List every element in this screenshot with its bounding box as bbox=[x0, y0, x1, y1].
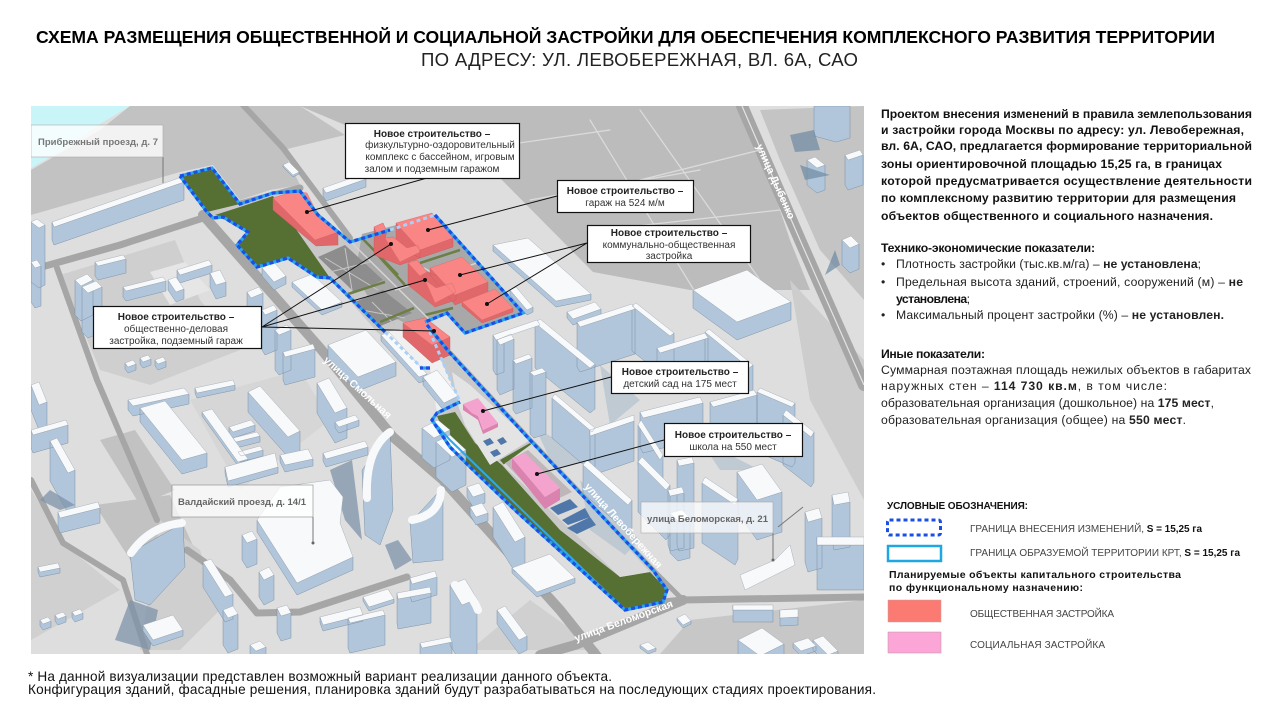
address label: Беломорская: улица Беломорская, д. 21 bbox=[647, 514, 769, 525]
existing buildings north bbox=[31, 106, 863, 340]
text block: technical indicators: установлена; bbox=[896, 292, 970, 306]
callout: kindergarten bbox=[612, 362, 748, 394]
green zones bbox=[180, 168, 330, 278]
callout: sports complex: залом и подземным гаражом bbox=[365, 164, 500, 175]
text block: technical indicators: Максимальный процент застройки (%) – не установлен. bbox=[896, 308, 1224, 322]
residential towers center bbox=[552, 388, 814, 565]
text block: intro: и застройки города Москвы по адресу: ул. Левобережная, bbox=[881, 123, 1244, 137]
text block: intro: вл. 6А, САО, предлагается формирование территориальной bbox=[881, 139, 1252, 153]
callout: school bbox=[664, 424, 802, 456]
legend item: social buildings: СОЦИАЛЬНАЯ ЗАСТРОЙКА bbox=[970, 638, 1105, 651]
footnote: * На данной визуализации представлен возможный вариант реализации данного объекта. bbox=[28, 669, 612, 684]
legend item: KRT boundary: ГРАНИЦА ОБРАЗУЕМОЙ ТЕРРИТОРИИ КРТ, S = 15,25 га bbox=[970, 546, 1240, 559]
street names: улица Левобережная bbox=[582, 481, 664, 571]
street names: улица Дыбенко bbox=[753, 142, 797, 221]
map road lines bbox=[31, 105, 864, 660]
callout: communal public: коммунально-общественная bbox=[603, 239, 735, 251]
footnote: Конфигурация зданий, фасадные решения, планировка зданий будут разрабатываться на последующих стадиях проектирования. bbox=[28, 682, 876, 697]
text block: technical indicators: • bbox=[881, 257, 885, 271]
callout: sports complex: физкультурно-оздоровительный bbox=[365, 139, 515, 151]
legend: Планируемые объекты капитального строительства bbox=[889, 569, 1181, 581]
callout: communal public bbox=[588, 226, 750, 262]
text block: other indicators: образовательная организация (дошкольное) на 175 мест, bbox=[881, 396, 1214, 410]
central development site bbox=[180, 168, 667, 610]
text block: intro: которой предусматривается осуществление деятельности bbox=[881, 174, 1252, 188]
existing buildings mid bbox=[31, 303, 753, 513]
residential shadows bbox=[535, 365, 760, 555]
address label: Валдайский проезд bbox=[172, 485, 314, 544]
address label: Беломорская bbox=[641, 502, 803, 562]
callout: garage bbox=[558, 180, 694, 212]
street names: улица Беломорская bbox=[573, 598, 675, 645]
title: СХЕМА РАЗМЕЩЕНИЯ ОБЩЕСТВЕННОЙ И СОЦИАЛЬНОЙ ЗАСТРОЙКИ ДЛЯ ОБЕСПЕЧЕНИЯ КОМПЛЕКСНОГО РАЗВИТИЯ ТЕРРИТОРИИ bbox=[36, 26, 1215, 47]
legend item: change boundary bbox=[888, 520, 1202, 535]
title: ПО АДРЕСУ: УЛ. ЛЕВОБЕРЕЖНАЯ, ВЛ. 6А, САО bbox=[421, 49, 858, 70]
gray ground plots bbox=[31, 106, 864, 654]
callout: garage: гараж на 524 м/м bbox=[585, 198, 665, 209]
legend item: change boundary: ГРАНИЦА ВНЕСЕНИЯ ИЗМЕНЕНИЙ, S = 15,25 га bbox=[970, 522, 1202, 535]
address label: Прибрежный проезд: Прибрежный проезд, д. 7 bbox=[38, 137, 158, 148]
callout: business: общественно-деловая bbox=[124, 323, 228, 335]
address label: Валдайский проезд: Валдайский проезд, д. 14/1 bbox=[178, 497, 307, 508]
street names bbox=[321, 142, 797, 645]
callout: kindergarten: детский сад на 175 мест bbox=[623, 379, 737, 390]
leader lines bbox=[262, 178, 664, 476]
legend item: public buildings bbox=[888, 600, 1114, 622]
new public buildings bbox=[273, 191, 513, 363]
callout: kindergarten: Новое строительство – bbox=[622, 367, 739, 378]
callout: sports complex: Новое строительство – bbox=[374, 129, 491, 140]
callout: business bbox=[94, 306, 262, 348]
legend: по функциональному назначению: bbox=[889, 582, 1083, 594]
text block: other indicators: Суммарная поэтажная площадь нежилых объектов в габаритах bbox=[881, 363, 1251, 377]
legend bbox=[887, 501, 1240, 653]
text block: intro: Проектом внесения изменений в правила землепользования bbox=[881, 107, 1252, 121]
legend item: public buildings: ОБЩЕСТВЕННАЯ ЗАСТРОЙКА bbox=[970, 607, 1114, 620]
panel: 3D site map bbox=[31, 105, 864, 670]
text block: intro: объектов общественного и социального назначения. bbox=[881, 209, 1213, 223]
text block: technical indicators: Предельная высота зданий, строений, сооружений (м) – не bbox=[896, 275, 1243, 289]
text block: other indicators: наружных стен – 114 730 кв.м, в том числе: bbox=[881, 379, 1167, 393]
text block: technical indicators: Плотность застройки (тыс.кв.м/га) – не установлена; bbox=[896, 257, 1201, 271]
boundary of changes dotted bbox=[180, 168, 667, 610]
callout: communal public: застройка bbox=[646, 251, 693, 262]
text block: intro bbox=[881, 107, 1252, 223]
callout: communal public: Новое строительство – bbox=[611, 228, 728, 239]
residential towers front of site bbox=[493, 320, 546, 438]
text block: technical indicators: • bbox=[881, 275, 885, 289]
callout: garage: Новое строительство – bbox=[567, 186, 684, 197]
existing buildings south bbox=[38, 432, 864, 670]
text block: intro: зоны ориентировочной площадью 15,25 га, в границах bbox=[881, 157, 1222, 171]
text block: technical indicators: Технико-экономические показатели: bbox=[881, 241, 1095, 255]
callout: business: застройка, подземный гараж bbox=[109, 336, 243, 347]
text block: other indicators: Иные показатели: bbox=[881, 347, 985, 361]
water area bbox=[31, 106, 130, 168]
KRT boundary cyan bbox=[432, 420, 625, 610]
title bbox=[36, 26, 1215, 70]
text block: intro: по комплексному развитию территории для размещения bbox=[881, 191, 1236, 205]
new social buildings bbox=[463, 398, 560, 509]
callout: sports complex: комплекс с бассейном, игровым bbox=[365, 151, 515, 163]
legend item: KRT boundary bbox=[888, 546, 1240, 561]
legend item: social buildings bbox=[888, 632, 1105, 653]
street names: улица Смольная bbox=[321, 354, 394, 421]
footnote bbox=[28, 669, 876, 697]
text block: technical indicators: • bbox=[881, 308, 885, 322]
callout: sports complex bbox=[346, 124, 520, 178]
callout: business: Новое строительство – bbox=[118, 312, 235, 323]
address label: Прибрежный проезд bbox=[31, 125, 163, 183]
text block: technical indicators bbox=[881, 241, 1243, 322]
text block: other indicators: образовательная организация (общее) на 550 мест. bbox=[881, 413, 1186, 427]
callout: school: школа на 550 мест bbox=[689, 442, 777, 453]
legend: УСЛОВНЫЕ ОБОЗНАЧЕНИЯ: bbox=[887, 501, 1028, 512]
hatched corridor bbox=[385, 215, 460, 402]
callout: school: Новое строительство – bbox=[675, 430, 792, 441]
solar panels bbox=[483, 437, 596, 534]
text block: other indicators bbox=[881, 347, 1251, 427]
